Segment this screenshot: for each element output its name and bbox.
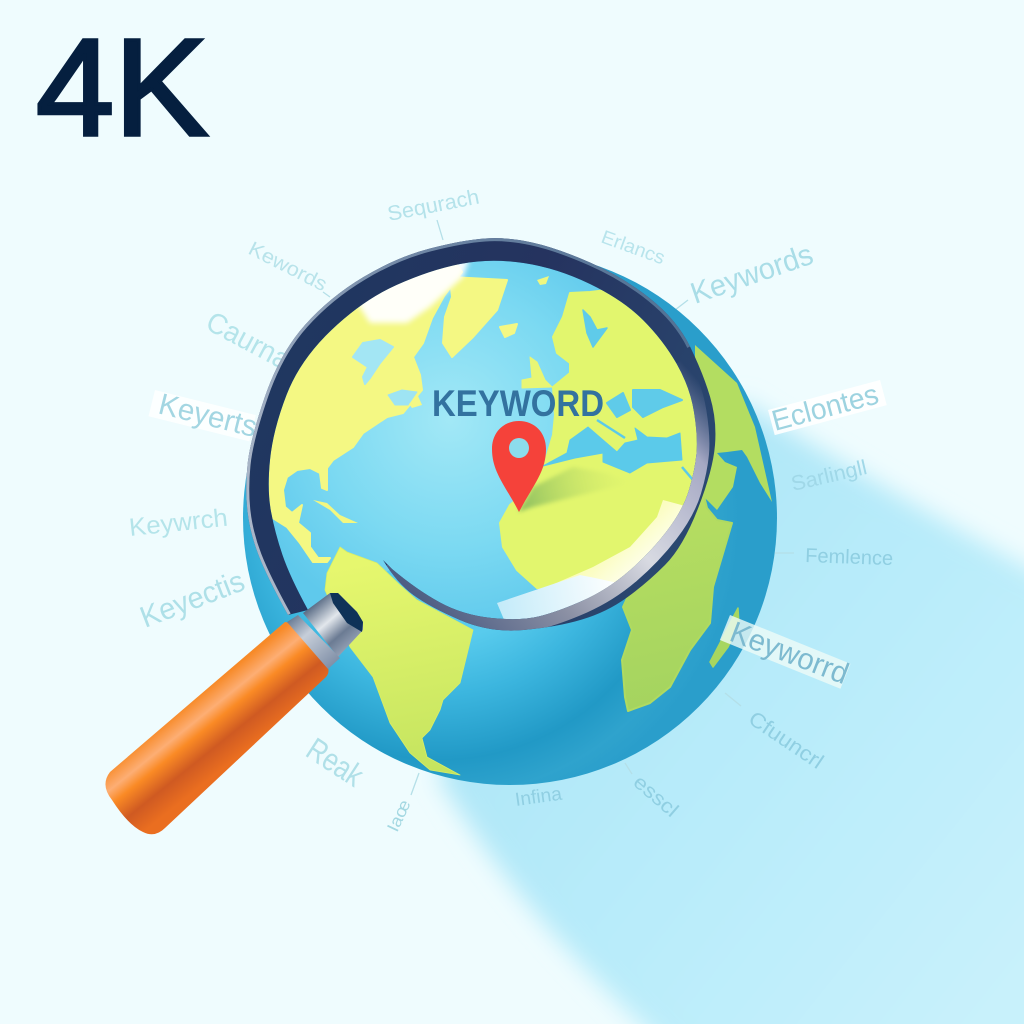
surrounding keyword labels: Keyectis — [136, 565, 249, 635]
surrounding keyword labels — [128, 186, 894, 835]
Newfoundland — [409, 396, 422, 408]
Gulf of St Lawrence — [388, 390, 417, 405]
land: North America — [268, 264, 463, 563]
keyword heading in lens: KEYWORD — [432, 383, 604, 424]
surrounding keyword labels: Keywrch — [128, 504, 229, 542]
land: British Isles — [522, 357, 552, 388]
Mediterranean Sea — [543, 427, 682, 473]
surrounding keyword labels: Sequrach — [386, 186, 481, 226]
Adriatic and Red Sea channels — [597, 420, 693, 480]
label connector lines — [323, 220, 794, 795]
keyword tag: Keyworrd: Keyworrd — [725, 616, 853, 691]
globe — [243, 251, 777, 785]
land: Madagascar — [710, 608, 739, 667]
rim inner silver band — [387, 364, 697, 619]
title: 4K — [36, 11, 208, 165]
location pin — [492, 421, 546, 512]
surrounding keyword labels: Sarlingll — [789, 456, 869, 496]
surrounding keyword labels: Reak — [300, 731, 371, 794]
land: Iceland — [500, 324, 517, 337]
surrounding keyword labels: Cfuuncrl — [744, 707, 828, 774]
globe cast shadow — [437, 400, 1024, 1024]
handle grip — [105, 622, 328, 834]
surrounding keyword labels: Kewords — [245, 238, 330, 296]
land: Africa on globe — [622, 480, 732, 711]
Caspian region sea — [607, 393, 630, 417]
magnifier rim — [246, 238, 715, 631]
lens glare upper — [556, 500, 683, 600]
land: Europe and Africa — [499, 290, 697, 589]
land: Cuba — [313, 500, 358, 523]
magnifier handle — [105, 593, 363, 834]
keyword tag: Eclontes: Eclontes — [769, 379, 882, 438]
magnifier lens — [268, 260, 697, 620]
surrounding keyword labels: Femlence — [805, 545, 894, 570]
land: Arabia edge — [695, 345, 772, 510]
metal neck — [303, 593, 363, 657]
land: South America — [325, 547, 473, 775]
surrounding keyword labels: Iaœ — [383, 797, 415, 835]
keyword tag: Keyerts: Keyerts — [155, 388, 260, 444]
lens glare lower — [497, 575, 614, 620]
Baltic Sea — [583, 310, 607, 347]
metal collar ring — [287, 615, 340, 669]
surrounding keyword labels: Erlancs — [598, 227, 667, 269]
rim outer light edge — [246, 238, 690, 615]
surrounding keyword labels: Keywords — [687, 238, 817, 311]
surrounding keyword labels: Infina — [514, 784, 564, 811]
land: Svalbard — [537, 276, 549, 285]
surrounding keyword labels: esscl — [629, 771, 682, 822]
pin ground shadow — [517, 466, 604, 514]
neck opening — [330, 593, 363, 632]
Hudson Bay — [353, 340, 393, 384]
land: Greenland — [443, 277, 507, 357]
lens highlight — [355, 258, 470, 323]
surrounding keyword labels: Caurna — [201, 306, 296, 377]
Black Sea — [633, 390, 682, 417]
